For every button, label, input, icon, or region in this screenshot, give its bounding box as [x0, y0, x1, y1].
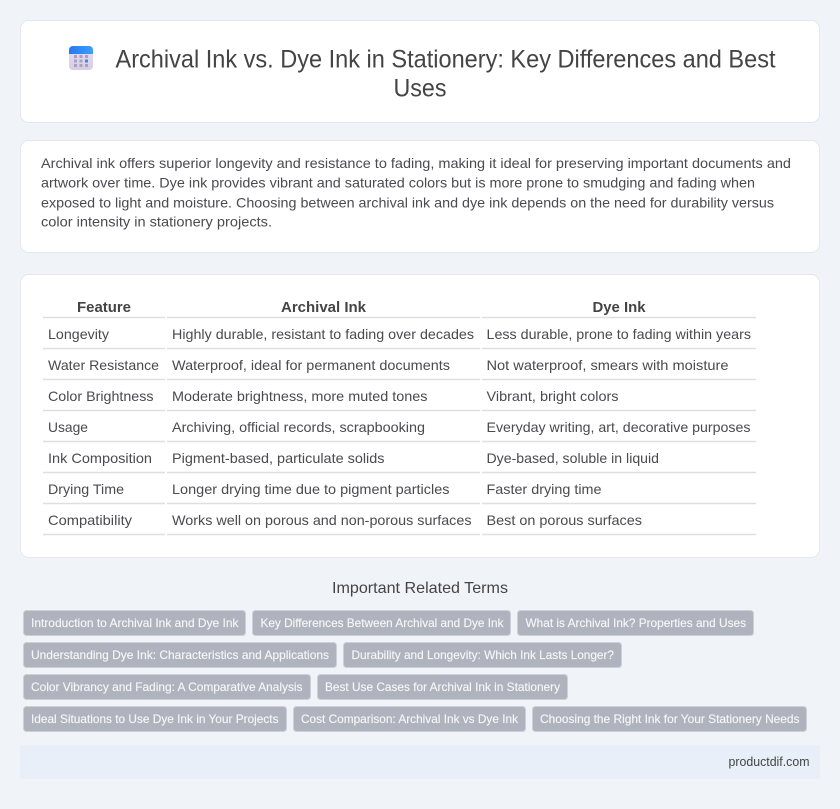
row: usage: Everyday writing, art, decorative purposes: [486, 419, 750, 435]
footer source: productdif.com: [728, 755, 810, 769]
row: longevity: Highly durable, resistant to fading over decades: [172, 326, 474, 342]
tag: [24, 642, 336, 668]
row: usage: Usage: [48, 419, 88, 435]
summary text: artwork over time. Dye ink provides vibrant and saturated colors but is more prone to smudging and fading when: [41, 174, 755, 190]
tag: [518, 610, 754, 636]
tag: [24, 706, 286, 732]
row: ink composition: Pigment-based, particulate solids: [172, 450, 384, 466]
panel: comparison table: [20, 274, 820, 558]
title: Archival Ink vs. Dye Ink in Stationery: Key Differences and Best: [116, 46, 776, 74]
summary text: exposed to light and moisture. Choosing between archival ink and dye ink depends on the need for durability versus: [41, 194, 774, 210]
tag: Ideal Situations to Use Dye Ink in Your Projects: [31, 712, 278, 726]
row: longevity: Less durable, prone to fading within years: [486, 326, 751, 342]
row: compatibility: Best on porous surfaces: [486, 512, 642, 528]
row: ink composition: [48, 450, 659, 466]
row: longevity: Longevity: [48, 326, 109, 342]
row: drying time: Faster drying time: [486, 481, 602, 497]
row: ink composition: Dye-based, soluble in liquid: [486, 450, 659, 466]
tag: What is Archival Ink? Properties and Uses: [526, 616, 746, 630]
panel: header: [20, 20, 820, 122]
tag: [532, 706, 806, 732]
tag: Choosing the Right Ink for Your Stationery Needs: [540, 712, 800, 726]
row: drying time: Drying Time: [48, 481, 124, 497]
tag: Introduction to Archival Ink and Dye Ink: [31, 616, 239, 630]
table header: Feature: [77, 300, 131, 316]
tag: Color Vibrancy and Fading: A Comparative Analysis: [31, 680, 302, 694]
table header: Dye Ink: [592, 300, 646, 316]
row: compatibility: Compatibility: [48, 512, 132, 528]
row: color brightness: Color Brightness: [48, 388, 154, 404]
row: water resistance: [48, 357, 729, 373]
summary text: [41, 155, 791, 230]
row: drying time: Longer drying time due to pigment particles: [172, 481, 450, 497]
row: color brightness: Moderate brightness, more muted tones: [172, 388, 428, 404]
row: compatibility: Works well on porous and non-porous surfaces: [172, 512, 472, 528]
row: color brightness: [48, 388, 618, 404]
panel: summary: [20, 140, 820, 252]
table header: [77, 300, 646, 316]
footer: [20, 745, 820, 779]
tag: Understanding Dye Ink: Characteristics and Applications: [31, 648, 329, 662]
summary text: Archival ink offers superior longevity and resistance to fading, making it ideal for preserving important documents and: [41, 155, 791, 171]
row: longevity: [48, 326, 751, 342]
tag: [294, 706, 526, 732]
tag: [344, 642, 622, 668]
row: usage: Archiving, official records, scrapbooking: [172, 419, 425, 435]
summary text: color intensity in stationery projects.: [41, 214, 272, 230]
tag: [24, 610, 246, 636]
tag: Key Differences Between Archival and Dye Ink: [260, 616, 504, 630]
title: [116, 46, 776, 102]
row: drying time: [48, 481, 602, 497]
row: water resistance: Water Resistance: [48, 357, 159, 373]
tag: Durability and Longevity: Which Ink Lasts Longer?: [352, 648, 614, 662]
row: ink composition: Ink Composition: [48, 450, 152, 466]
row: water resistance: Not waterproof, smears with moisture: [486, 357, 729, 373]
title: Uses: [394, 74, 446, 102]
icon: calendar: [69, 46, 93, 70]
related term tags: [24, 610, 806, 732]
row: compatibility: [48, 512, 642, 528]
tag: Cost Comparison: Archival Ink vs Dye Ink: [301, 712, 519, 726]
heading: related terms: Important Related Terms: [332, 580, 508, 597]
row: usage: [48, 419, 750, 435]
row: water resistance: Waterproof, ideal for permanent documents: [172, 357, 450, 373]
table header: Archival Ink: [281, 300, 367, 316]
row: color brightness: Vibrant, bright colors: [486, 388, 618, 404]
tag: [24, 674, 310, 700]
tag: Best Use Cases for Archival Ink in Stationery: [325, 680, 560, 694]
tag: [318, 674, 568, 700]
tag: [252, 610, 510, 636]
